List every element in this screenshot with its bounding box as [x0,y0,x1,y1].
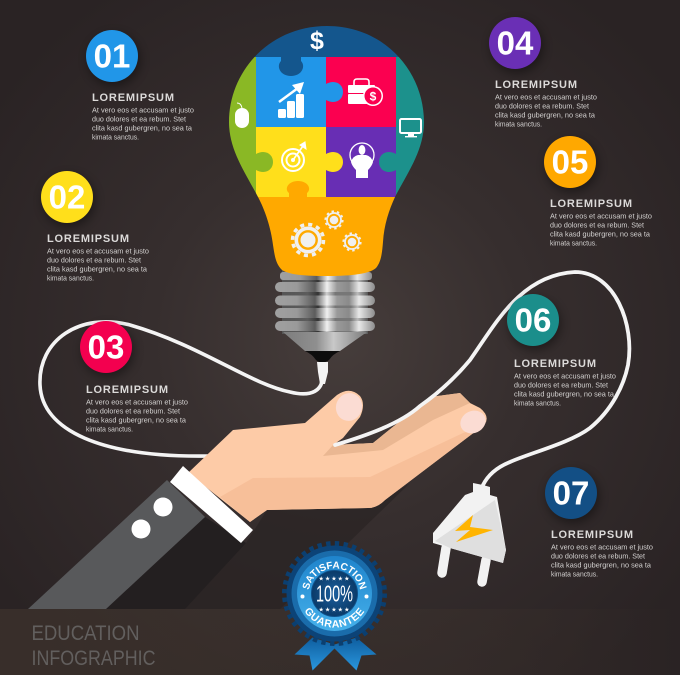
socket body [282,270,368,334]
seal edge [286,544,384,642]
text 04 [495,92,597,128]
circle 02: 02 [49,178,85,216]
power cable to wrist [40,322,322,456]
text 05: duo dolores et ea rebum. Stet [550,220,644,230]
heading 03: LOREMIPSUM [86,384,168,396]
tab teal [379,152,396,172]
bulb socket [275,270,375,384]
text 07: At vero eos et accusam et justo [551,542,653,552]
item 02 [41,171,149,282]
cord stub [317,362,328,384]
lightning bolt [455,515,493,542]
heading 01: LOREMIPSUM [92,92,174,104]
text 06: duo dolores et ea rebum. Stet [514,380,608,390]
icon: gears [292,211,361,256]
sleeve and hand [28,389,489,609]
circle 06: 06 [515,302,551,338]
item 01 [86,30,194,142]
text 03: clita kasd gubergren, no sea ta [86,416,187,424]
text 01: clita kasd gubergren, no sea ta [92,124,193,132]
heading 04: LOREMIPSUM [495,79,577,91]
socket tip [305,351,340,362]
icon: idea person [350,143,374,178]
finger nail [457,407,489,437]
bulb glass puzzle [229,26,424,276]
icon: plug [433,483,506,582]
socket threads [275,282,375,331]
tab blue [326,82,343,102]
text 06: At vero eos et accusam et justo [514,372,616,380]
icon: dollar: $ [310,27,324,55]
text 05 [550,212,652,248]
text 01 [92,106,194,142]
ribbons [294,638,376,670]
circle 01: 01 [94,38,130,74]
text 07: kimata sanctus. [551,570,598,578]
text 03: At vero eos et accusam et justo [86,398,188,406]
text 04: kimata sanctus. [495,120,542,128]
power cable to plug [335,272,629,485]
text 05: kimata sanctus. [550,238,597,248]
circle 04: 04 [497,24,534,62]
heading 02: LOREMIPSUM [47,233,129,245]
text 03 [86,398,188,434]
socket taper [283,332,367,351]
icon: growth chart [278,82,304,118]
socket collar [280,272,372,280]
title [32,622,156,670]
icon: briefcase: $ [370,90,377,104]
puzzle right teal [396,57,424,195]
text 03: duo dolores et ea rebum. Stet [86,406,180,416]
tab orange [287,181,309,197]
text 06: kimata sanctus. [514,398,561,408]
text 06 [514,372,616,408]
title line 2: INFOGRAPHIC [32,647,156,670]
plug prongs [442,548,486,582]
text 100 percent: 100% [316,580,353,606]
tab yellow [326,152,343,172]
tab green [256,152,273,172]
text satisfaction: SATISFACTION [302,562,367,590]
floor band [0,609,680,675]
text 03: kimata sanctus. [86,424,133,434]
heading 07: LOREMIPSUM [551,529,633,541]
sleeve button 2 [132,520,150,538]
hand [188,391,487,522]
text 07 [551,542,653,578]
ring dots [300,594,304,598]
item 03 [80,321,188,434]
text 02 [47,246,149,282]
puzzle red [326,57,396,127]
title line 1: EDUCATION [32,622,140,645]
text 07: duo dolores et ea rebum. Stet [551,552,645,560]
light bulb [220,20,430,384]
heading 05: LOREMIPSUM [550,198,632,210]
palm shade [220,428,480,522]
puzzle blue [256,57,326,127]
text 01: duo dolores et ea rebum. Stet [92,114,186,124]
white cuff [170,466,253,543]
text 02: kimata sanctus. [47,274,94,282]
text 02: duo dolores et ea rebum. Stet [47,256,141,264]
puzzle top navy [254,26,399,57]
puzzle purple [326,127,396,197]
text 04: clita kasd gubergren, no sea ta [495,110,596,120]
text 05: clita kasd gubergren, no sea ta [550,230,651,238]
icon: briefcase [348,79,383,106]
item 04 [489,17,597,128]
text 06: clita kasd gubergren, no sea ta [514,390,615,398]
icon: target [282,142,306,171]
text 02: At vero eos et accusam et justo [47,246,149,256]
icon: mouse [235,103,249,128]
text 04: duo dolores et ea rebum. Stet [495,102,589,110]
satisfaction badge [282,541,387,670]
circle 03: 03 [88,328,124,366]
sleeve button 1 [154,498,172,516]
circle 07: 07 [553,474,589,512]
plug facet [435,500,506,563]
text 02: clita kasd gubergren, no sea ta [47,264,148,274]
stars top: ★★★★★ [319,576,350,582]
stars bottom: ★★★★★ [319,606,350,614]
text 07: clita kasd gubergren, no sea ta [551,560,652,570]
sleeve [28,480,205,609]
text 01: At vero eos et accusam et justo [92,106,194,114]
inner finger shade [323,393,470,456]
item 07 [545,467,653,578]
heading 06: LOREMIPSUM [514,358,596,370]
small gear right [343,233,361,251]
plug body [433,483,506,563]
sleeve shade [106,517,246,609]
seal ring [297,556,372,631]
puzzle yellow [256,127,326,197]
large gear [292,224,324,256]
thumb nail [332,389,366,425]
seal centre [312,570,358,616]
text guarantee: GUARANTEE [306,608,364,628]
icon: monitor [400,119,421,137]
text 05: At vero eos et accusam et justo [550,212,652,220]
tab navy [279,57,303,76]
seal disc [286,546,382,642]
circle 05: 05 [552,144,588,180]
long hand shadow [185,483,410,609]
item 05 [544,136,652,248]
text 01: kimata sanctus. [92,132,139,142]
text 04: At vero eos et accusam et justo [495,92,597,102]
small gear top [325,211,343,229]
item 06 [507,294,616,408]
puzzle left green [229,57,256,193]
puzzle orange [258,197,395,276]
